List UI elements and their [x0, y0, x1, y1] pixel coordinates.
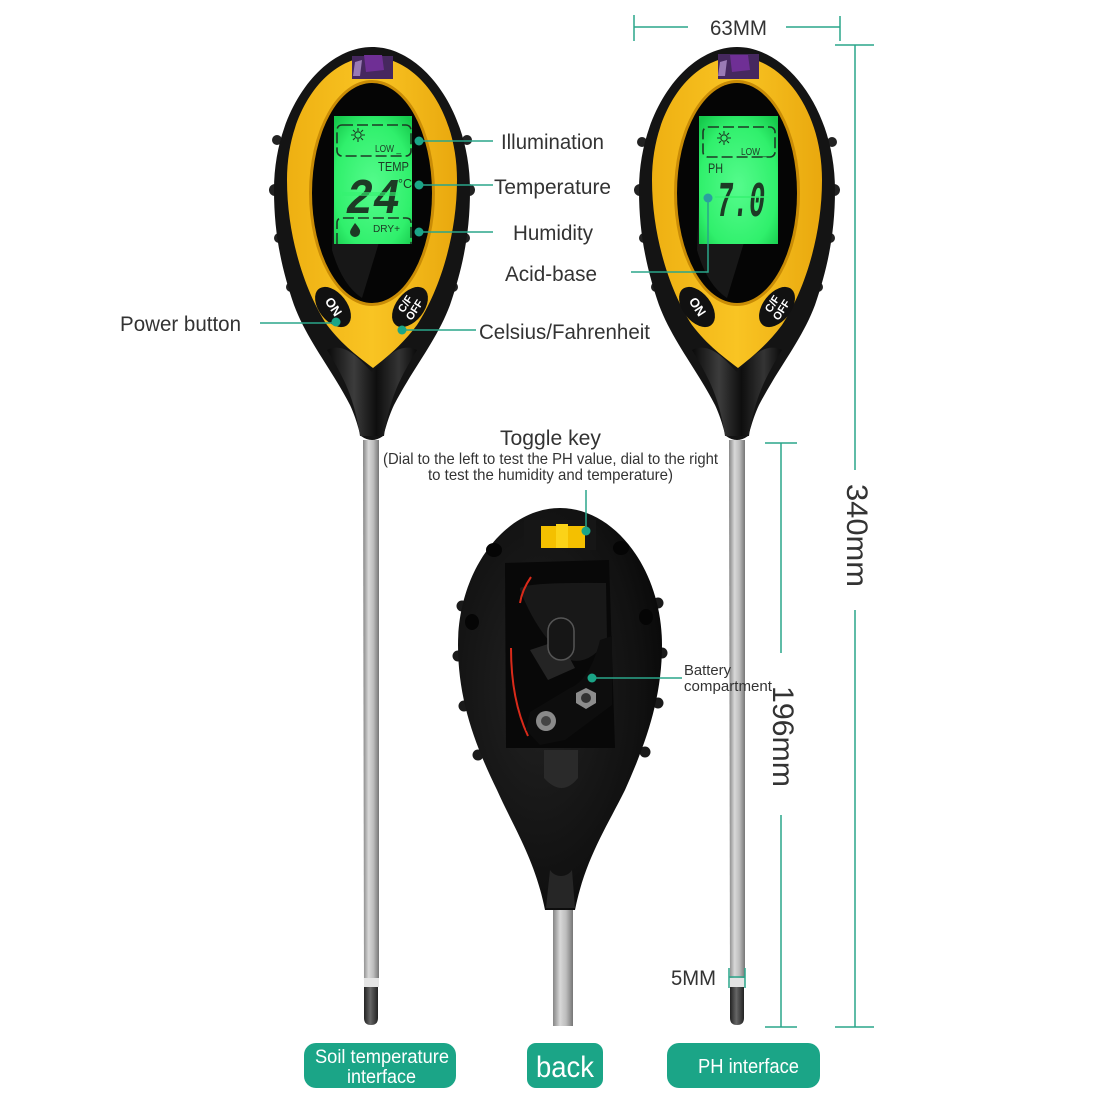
- callout: Battery compartment: Battery: [684, 662, 731, 679]
- dimension: 5MM: 5MM: [671, 967, 716, 990]
- dimension: 196mm: [765, 443, 799, 1027]
- label: back: [527, 1043, 603, 1088]
- LCD screen: temperature: [334, 116, 412, 244]
- label: PH interface: PH interface: [698, 1056, 799, 1078]
- probe: PH: [729, 440, 745, 1025]
- callout: Acid-base: [505, 194, 712, 286]
- probe: soil temperature: [363, 440, 379, 1025]
- dimension: 5MM: [671, 967, 745, 990]
- LOW label: LOW _: [375, 144, 401, 155]
- humidity box: [337, 218, 411, 244]
- dimension: 340mm: [835, 45, 874, 1027]
- LOW label: LOW _: [741, 147, 767, 158]
- callout: Battery compartment: compartment: [684, 678, 773, 695]
- meter body: [634, 47, 840, 440]
- button: C/F OFF: C/F: [396, 293, 416, 315]
- button: C/F OFF: [385, 280, 435, 334]
- DRY label: DRY+: [373, 224, 400, 235]
- back probe: [553, 900, 573, 1026]
- icon: sun: [717, 131, 731, 145]
- label: back: back: [536, 1051, 595, 1084]
- meter body: [269, 47, 475, 440]
- icon: sun: [351, 128, 365, 142]
- meter: soil temperature front view: [269, 47, 475, 1025]
- label: Soil temperature interface: Soil temperature: [315, 1047, 449, 1068]
- dimension: 340mm: 340mm: [840, 484, 873, 587]
- PH label: PH: [708, 160, 723, 176]
- callout: Temperature: Temperature: [494, 176, 611, 199]
- meter: back view: [452, 508, 668, 1026]
- battery clip: [526, 636, 612, 745]
- callout: Power button: Power button: [120, 313, 241, 336]
- callout: Toggle key: [383, 427, 719, 536]
- callout: Illumination: [414, 131, 604, 154]
- PH reading: 7.0: [717, 175, 765, 232]
- button: C/F OFF: C/F: [763, 293, 783, 315]
- temperature reading: 24: [346, 172, 400, 229]
- button: ON: [308, 280, 358, 334]
- callout: Toggle key: to test the humidity and temperature): [428, 467, 673, 484]
- callout: Toggle key: Toggle key: [500, 427, 601, 450]
- label: PH interface: [667, 1043, 820, 1088]
- red wires: [511, 577, 531, 736]
- callout: Celsius/Fahrenheit: [398, 321, 650, 344]
- button: ON: ON: [322, 294, 345, 319]
- dimension: 196mm: 196mm: [766, 686, 799, 787]
- button: C/F OFF: [752, 280, 802, 334]
- toggle key: [524, 520, 596, 550]
- screw: round: [536, 711, 556, 731]
- dimension: 63MM: [634, 15, 840, 41]
- battery compartment: [505, 560, 615, 788]
- button: C/F OFF: OFF: [404, 298, 426, 323]
- callout: Temperature: [414, 176, 611, 199]
- callout: Acid-base: Acid-base: [505, 263, 597, 286]
- illumination box: [703, 127, 775, 157]
- callout: Humidity: [414, 222, 593, 245]
- callout: Toggle key: (Dial to the left to test the PH value, dial to the right: [383, 451, 719, 468]
- icon: water drop: [350, 223, 360, 237]
- callout: Power button: [120, 313, 340, 336]
- callout: Battery compartment: [588, 662, 773, 695]
- callout: Illumination: Illumination: [501, 131, 604, 154]
- back body: [452, 508, 668, 910]
- screw: hex: [576, 688, 596, 709]
- callout: Celsius/Fahrenheit: Celsius/Fahrenheit: [479, 321, 650, 344]
- label: Soil temperature interface: [304, 1043, 456, 1088]
- meter: PH front view: [634, 47, 840, 1025]
- dimension: 63MM: 63MM: [710, 17, 767, 40]
- button: ON: ON: [686, 294, 709, 319]
- LCD screen: PH: [699, 116, 778, 244]
- label: Soil temperature interface: interface: [347, 1067, 416, 1088]
- TEMP label: TEMP: [378, 159, 409, 174]
- illumination box: [337, 125, 411, 156]
- button: ON: [672, 280, 722, 334]
- latch: [544, 750, 578, 788]
- degree C: °C: [398, 176, 412, 191]
- button: C/F OFF: OFF: [771, 298, 793, 323]
- callout: Humidity: Humidity: [513, 222, 593, 245]
